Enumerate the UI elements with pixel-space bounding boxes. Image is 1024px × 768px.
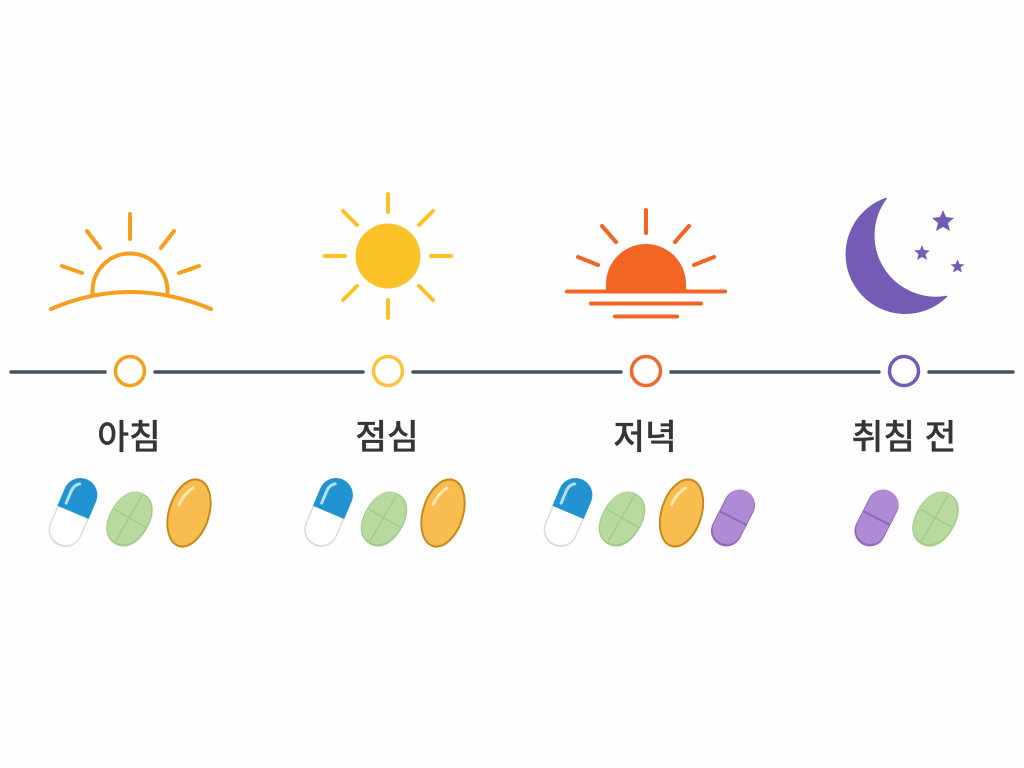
label: noon: 점심 (355, 419, 419, 457)
capsule (299, 473, 358, 552)
purple tablet (849, 484, 904, 552)
pills: bedtime (849, 484, 967, 554)
orange softgel (652, 474, 711, 552)
timeline marker: morning (116, 356, 144, 386)
green tablet (590, 484, 654, 554)
orange softgel (160, 474, 218, 552)
green tablet (904, 484, 967, 554)
capsule (538, 473, 598, 552)
timeline marker: noon (374, 356, 402, 386)
icon: noon sun (325, 194, 451, 318)
label: bedtime: 취침 전 (852, 419, 956, 457)
icon: morning sunrise (51, 214, 211, 309)
timeline marker: bedtime (890, 356, 918, 386)
capsule (43, 473, 103, 552)
green tablet (98, 484, 161, 554)
label: evening: 저녁 (613, 419, 677, 457)
icon: evening sunset (567, 210, 725, 316)
icon: crescent moon and stars (846, 198, 964, 313)
label: morning: 아침 (97, 419, 161, 457)
pills: noon (299, 473, 472, 554)
green tablet (352, 484, 416, 554)
pills: evening (538, 473, 760, 554)
orange softgel (414, 474, 472, 552)
timeline marker: evening (632, 356, 660, 386)
purple tablet (706, 484, 760, 552)
timeline (11, 356, 1013, 386)
pills: morning (43, 473, 218, 554)
